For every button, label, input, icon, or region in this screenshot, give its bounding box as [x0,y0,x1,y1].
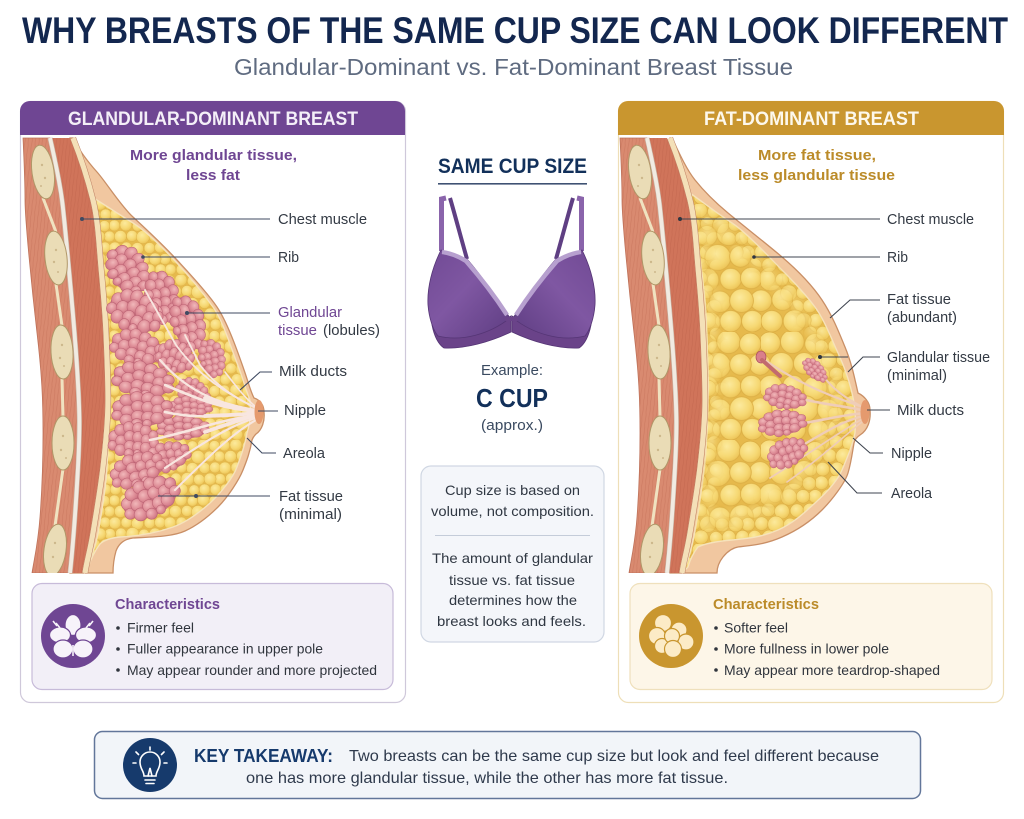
example cup label: (approx.) [481,417,543,434]
takeaway text: KEY TAKEAWAY: [194,746,333,766]
callout labels: (lobules) [323,323,380,339]
callout labels [887,212,990,502]
callout labels: Rib [278,250,299,266]
callout labels: Chest muscle [887,212,974,228]
icon: purple bra [428,198,595,348]
callout labels: Fat tissue [279,489,343,505]
callout labels: Nipple [891,446,932,462]
tagline: More fat tissue, [758,147,876,164]
note box [421,466,604,642]
nipple [860,400,870,424]
nipple [254,400,264,424]
tagline: More glandular tissue, [130,147,297,164]
tagline [130,147,297,184]
leader lines [80,217,278,498]
callout labels: Glandular tissue [887,350,990,366]
callout labels: Milk ducts [279,364,347,380]
panel header [618,101,1004,135]
anatomy illustration: fat breast [620,138,870,577]
ducts [762,358,866,482]
lobules [97,237,230,529]
callout labels: tissue [278,323,317,339]
characteristics text: glandular [115,597,377,678]
callout labels: (minimal) [279,507,342,523]
callout labels: Glandular [278,305,342,321]
characteristics text: glandular: May appear rounder and more projected [127,662,377,678]
callout labels: Fat tissue [887,292,951,308]
lobules [756,351,832,475]
example cup label: Example: [481,363,543,379]
panel header: GLANDULAR-DOMINANT BREAST [68,109,358,130]
tagline [738,147,895,184]
panel frame [618,102,1004,702]
panel: glandular-dominant breast [20,101,406,702]
tagline: less fat [186,167,240,184]
characteristics text: fat: May appear more teardrop-shaped [724,662,940,678]
ducts [145,290,256,490]
icon: fat cells [639,604,703,668]
note box: volume, not composition. [431,503,594,519]
leader lines [678,217,890,493]
note box: determines how the [449,592,577,608]
tagline: less glandular tissue [738,167,895,184]
callout labels: Nipple [284,403,326,419]
callout labels: Areola [891,486,933,502]
characteristics box: glandular [32,584,393,690]
panel: fat-dominant breast [618,101,1004,702]
panel: center comparison [421,155,604,642]
callout labels: Areola [283,446,326,462]
callout labels: Rib [887,250,908,266]
example cup label: C CUP [476,383,548,413]
callout labels: Milk ducts [897,403,964,419]
characteristics box: fat [630,584,992,690]
characteristics text: glandular: Characteristics [115,597,220,613]
characteristics text: fat: Softer feel [724,620,788,636]
key takeaway banner [94,732,920,798]
subtitle: Glandular-Dominant vs. Fat-Dominant Breast Tissue [234,54,793,80]
callout labels: (minimal) [887,368,947,384]
panel frame [20,102,406,702]
icon: light bulb [123,738,177,792]
characteristics text: fat: Characteristics [713,597,819,613]
note box: Cup size is based on [445,482,580,498]
callout labels [278,212,380,523]
note box: The amount of glandular [432,550,593,566]
note box: tissue vs. fat tissue [449,572,575,588]
heading: same cup size: SAME CUP SIZE [438,155,587,178]
takeaway text [194,746,879,787]
characteristics text: fat: More fullness in lower pole [724,640,889,656]
anatomy illustration: glandular breast [23,138,264,577]
characteristics text: glandular: Fuller appearance in upper pole [127,640,323,656]
callout labels: Chest muscle [278,212,367,228]
panel header [20,101,405,135]
takeaway text: Two breasts can be the same cup size but look and feel different because [349,748,879,765]
takeaway text: one has more glandular tissue, while the other has more fat tissue. [246,770,728,787]
characteristics text: fat [713,597,940,678]
callout labels: (abundant) [887,310,957,326]
icon: glandular lobule flower [41,604,105,668]
characteristics text: glandular: Firmer feel [127,620,194,636]
note box: breast looks and feels. [437,613,586,629]
example cup label [476,363,548,434]
panel header: FAT-DOMINANT BREAST [704,109,919,130]
